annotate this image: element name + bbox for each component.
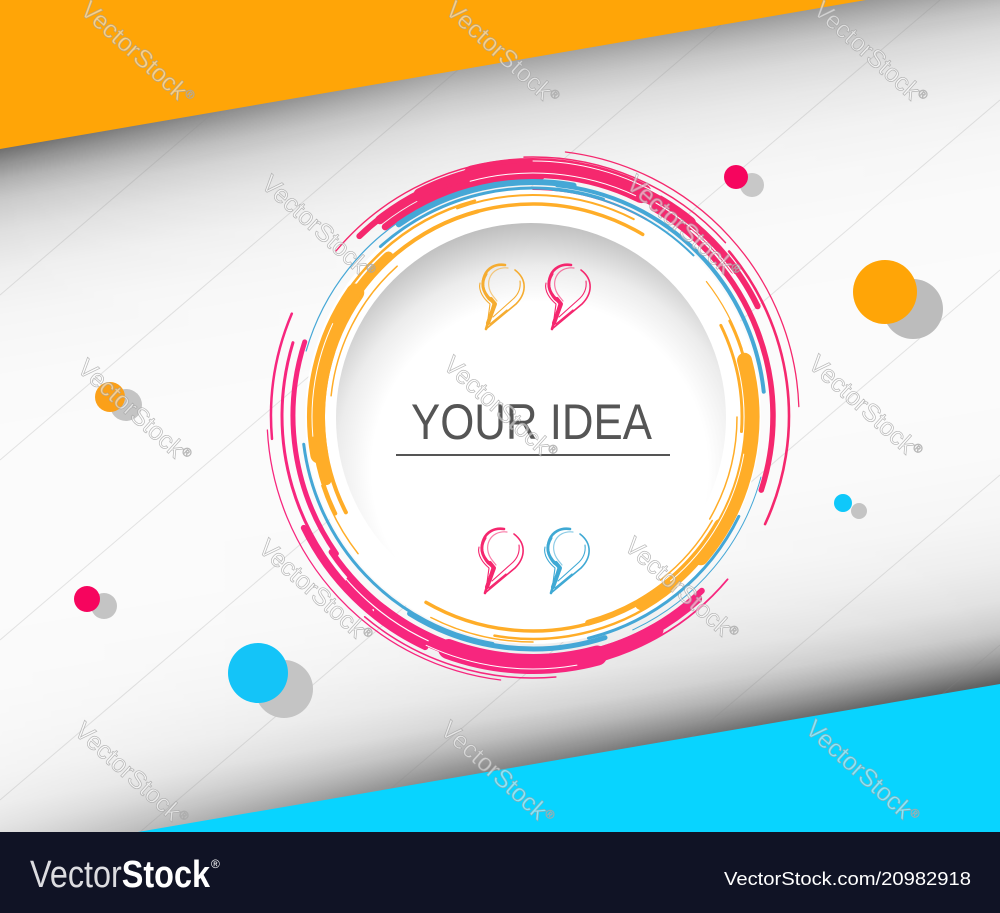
icon: pink lower speech pin: [479, 529, 523, 593]
watermarks: ®: [915, 86, 931, 103]
watermarks: ®: [176, 807, 192, 824]
white streaks in pink: [197, 80, 869, 752]
watermarks: ®: [363, 260, 379, 277]
orange brush strokes: [220, 104, 846, 730]
pink brush strokes bottom: [175, 58, 891, 774]
swirl ring: [171, 54, 895, 778]
watermarks: ®: [910, 440, 926, 457]
pink brush strokes top: [171, 54, 895, 778]
dot: pink left: [74, 586, 117, 619]
watermarks: VectorStock: [803, 350, 921, 460]
watermarks: VectorStock: [435, 716, 553, 826]
dot: pink top right: [724, 165, 764, 197]
dot: large blue lower left: [228, 643, 313, 718]
top orange band: [0, 0, 866, 149]
icon: pink speech pin: [546, 265, 590, 329]
watermarks: ®: [179, 444, 195, 461]
dot: small orange left: [95, 382, 142, 421]
watermarks: ®: [360, 624, 376, 641]
white streaks in orange: [285, 169, 781, 665]
watermarks: VectorStock: [800, 715, 918, 825]
watermarks: VectorStock: [72, 354, 190, 464]
footer bar: [0, 832, 1000, 913]
watermarks: VectorStock: [69, 717, 187, 827]
watermarks: VectorStock: [619, 532, 737, 642]
watermarks: ®: [728, 260, 744, 277]
bottom blue band: [138, 684, 1000, 832]
title: your idea: YOUR IDEA: [411, 394, 653, 450]
footer logo: VectorStock: [30, 854, 211, 896]
footer image id: VectorStock.com/20982918: [724, 868, 971, 889]
dot: small blue right: [834, 494, 867, 519]
watermarks: VectorStock: [253, 534, 371, 644]
watermarks: ®: [545, 441, 561, 458]
watermarks: ®: [542, 806, 558, 823]
icon: orange speech pin: [480, 265, 524, 329]
watermarks: ®: [182, 86, 198, 103]
watermarks: VectorStock: [621, 170, 739, 280]
watermarks: VectorStock: [438, 351, 556, 461]
icon: blue speech pin: [545, 529, 589, 593]
blue brush strokes: [207, 90, 859, 742]
watermarks: ®: [726, 622, 742, 639]
watermarks: ®: [907, 805, 923, 822]
centre white disc behind ring: [305, 188, 761, 644]
footer registered mark: ®: [211, 857, 220, 871]
title underline: [396, 454, 670, 456]
watermarks: [69, 0, 932, 833]
inner recessed circle: [336, 223, 726, 613]
watermarks: VectorStock: [256, 170, 374, 280]
dot: large orange right: [853, 260, 943, 339]
watermarks: ®: [547, 86, 563, 103]
